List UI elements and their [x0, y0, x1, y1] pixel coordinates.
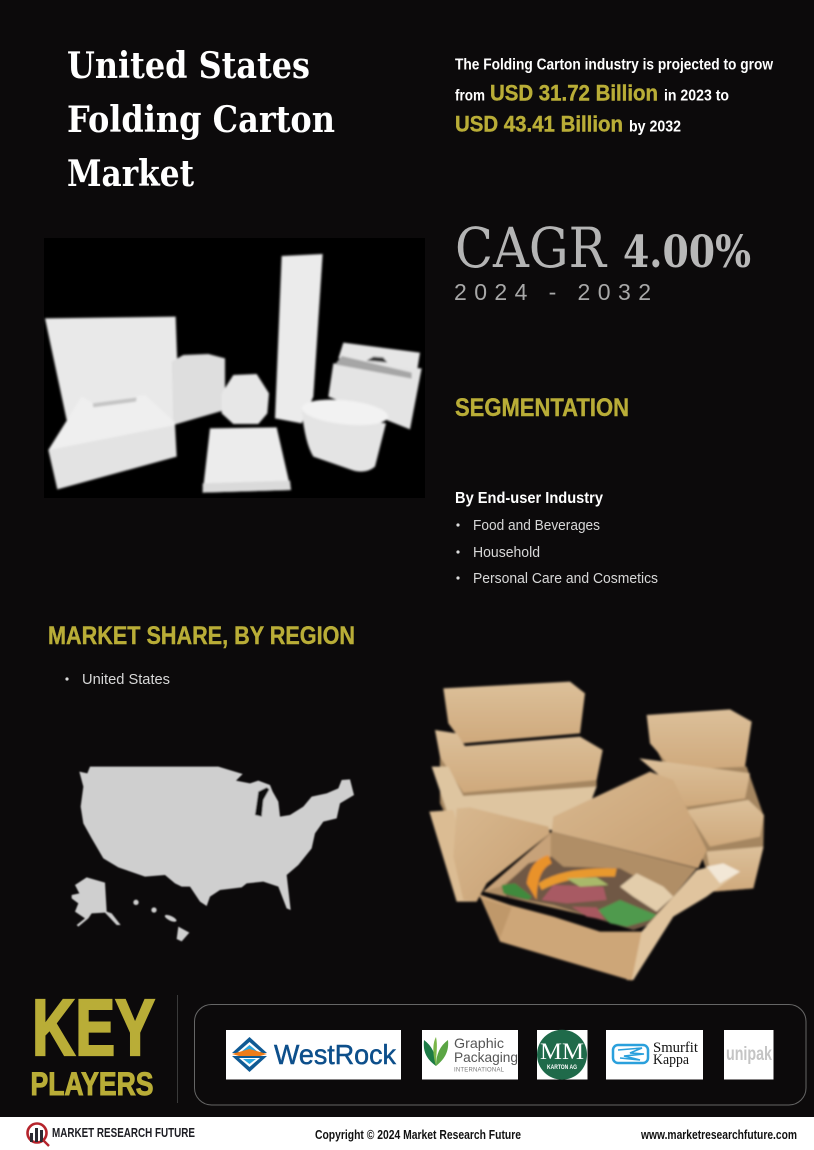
logo: Graphic Packaging [422, 1030, 518, 1080]
logo: MM Karton: MM [540, 1039, 584, 1064]
CAGR figure: 4.00% [623, 227, 751, 278]
heading: key players: PLAYERS [30, 1066, 154, 1102]
segmentation list: By End-user Industry [455, 490, 603, 507]
map: United States [72, 767, 354, 941]
title: Folding Carton [67, 99, 335, 141]
logo: WestRock [226, 1030, 401, 1080]
copyright: Copyright © 2024 Market Research Future [315, 1128, 521, 1142]
market projection text: USD 43.41 Billion [455, 112, 623, 136]
market projection text: USD 31.72 Billion [490, 80, 658, 106]
logo: MM Karton: KARTON AG [547, 1065, 577, 1071]
photo: kraft food boxes [429, 682, 764, 981]
logo: WestRock: WestRock [274, 1039, 397, 1070]
segmentation list [455, 490, 658, 587]
logo: Smurfit Kappa: Kappa [653, 1052, 689, 1068]
heading: key players: KEY [32, 983, 155, 1072]
logo: MM Karton [537, 1030, 588, 1080]
segmentation list: Household [473, 544, 540, 561]
heading: segmentation: SEGMENTATION [455, 394, 629, 422]
CAGR figure: 2024 - 2032 [454, 279, 651, 305]
logo: Graphic Packaging: Packaging [454, 1049, 518, 1065]
footer brand name: MARKET RESEARCH FUTURE [52, 1126, 195, 1140]
heading: market share by region: MARKET SHARE, BY REGION [48, 622, 355, 650]
panel: key player logos [194, 1004, 806, 1105]
market projection text [455, 56, 773, 136]
logo: Smurfit Kappa [606, 1030, 703, 1080]
logo: Unipak: unipak [726, 1044, 772, 1065]
photo: white folding cartons [44, 238, 425, 498]
logo: Graphic Packaging: Graphic [454, 1035, 504, 1051]
logo: Smurfit Kappa: Smurfit [653, 1040, 699, 1056]
title: United States [67, 45, 310, 87]
logo: Graphic Packaging: INTERNATIONAL [454, 1068, 505, 1074]
market projection text: by 2032 [629, 118, 681, 136]
logo: Unipak [724, 1030, 774, 1080]
title: Market [67, 153, 194, 195]
footer [0, 1117, 814, 1150]
heading: key players [30, 983, 155, 1102]
market projection text: in 2023 to [664, 88, 729, 104]
region list: United States [82, 671, 170, 688]
segmentation list: Food and Beverages [473, 517, 600, 534]
icon: Market Research Future logo [28, 1124, 49, 1146]
title [67, 45, 335, 195]
CAGR figure: CAGR [455, 216, 607, 280]
market projection text: from [455, 88, 485, 104]
segmentation list: Personal Care and Cosmetics [473, 570, 658, 587]
CAGR figure [454, 216, 751, 305]
